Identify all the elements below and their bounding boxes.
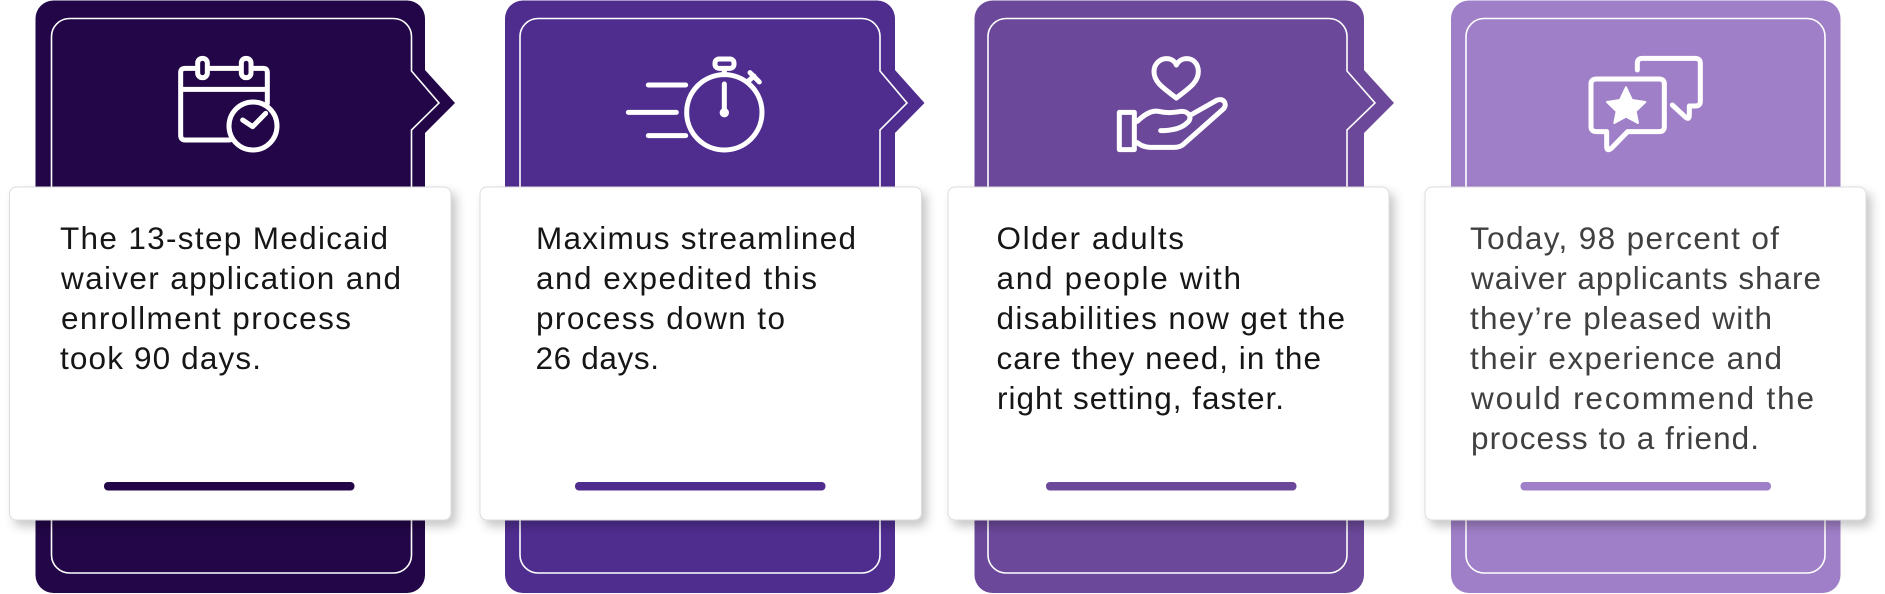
text: step 2: Maximus streamlined (536, 220, 856, 256)
icon: hand holding heart (1119, 59, 1225, 150)
card background (1451, 0, 1840, 593)
text: step 3: right setting, faster. (997, 380, 1284, 416)
text: step 4: their experience and (1470, 340, 1782, 376)
card background with arrow (36, 0, 455, 593)
inner outline (1466, 18, 1825, 573)
text: step 1 (60, 220, 401, 376)
text: step 2: 26 days. (536, 340, 659, 376)
text: step 1: enrollment process (61, 300, 351, 336)
icon: speech bubbles with star (1591, 58, 1700, 150)
panel: step 1, 90-day process (10, 0, 455, 593)
panel: step 4, satisfaction (1425, 0, 1866, 593)
text: step 2: process down to (536, 300, 785, 336)
text: step 4: waiver applicants share (1470, 260, 1821, 296)
icon: stopwatch (628, 59, 762, 150)
text: step 3: Older adults (996, 220, 1184, 256)
icon: calendar with check (181, 58, 277, 150)
panel: step 3, care outcome (948, 0, 1394, 593)
white text card (480, 187, 922, 520)
text: step 3: disabilities now get the (996, 300, 1345, 336)
text: step 3 (996, 220, 1345, 416)
white text card (948, 187, 1389, 520)
accent bar (104, 482, 354, 490)
text: step 4: they’re pleased with (1470, 300, 1772, 336)
text: step 4 (1470, 220, 1821, 456)
text: step 2: and expedited this (536, 260, 817, 296)
text: step 4: Today, 98 percent of (1470, 220, 1779, 256)
text: step 1: took 90 days. (60, 340, 261, 376)
text: step 3: care they need, in the (996, 340, 1321, 376)
white text card (1425, 187, 1866, 520)
inner outline (520, 18, 907, 573)
text: step 2 (536, 220, 856, 376)
text: step 1: The 13-step Medicaid (60, 220, 388, 256)
accent bar (575, 482, 826, 490)
card background with arrow (974, 0, 1394, 593)
text: step 4: would recommend the (1470, 380, 1814, 416)
text: step 3: and people with (996, 260, 1241, 296)
text: step 1: waiver application and (60, 260, 401, 296)
text: step 4: process to a friend. (1471, 420, 1759, 456)
inner outline (988, 18, 1375, 573)
accent bar (1046, 482, 1296, 490)
white text card (10, 187, 451, 520)
accent bar (1520, 482, 1771, 490)
card background with arrow (505, 0, 924, 593)
inner outline (52, 18, 439, 573)
panel: step 2, streamlined process (480, 0, 924, 593)
